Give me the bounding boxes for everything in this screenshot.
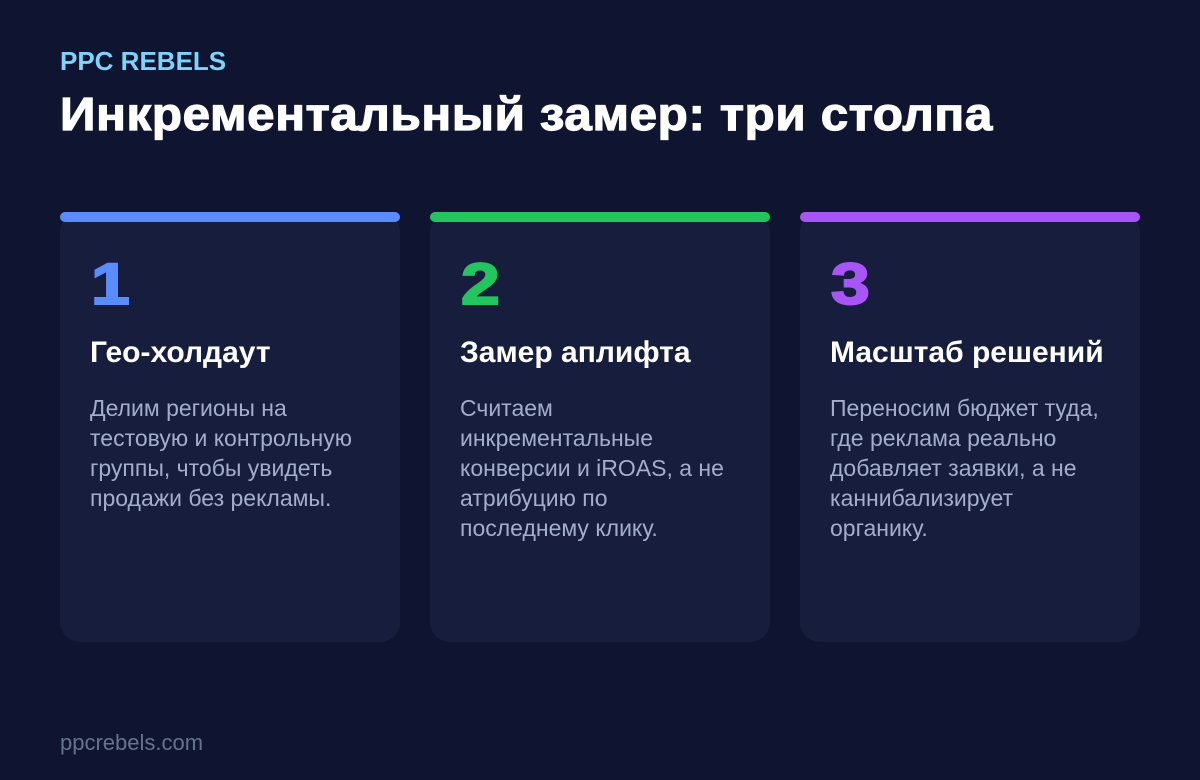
text: scale: где реклама реально	[830, 425, 1056, 451]
text: uplift: конверсии и iROAS, а не	[460, 455, 724, 481]
number 1: 1	[91, 252, 130, 317]
text: uplift: последнему клику.	[460, 515, 658, 541]
heading: geo holdout: Гео-холдаут	[90, 336, 271, 369]
heading: uplift: Замер аплифта	[460, 336, 691, 369]
number 3: 3	[831, 252, 870, 317]
text: uplift: Считаем	[460, 395, 553, 421]
text: scale: добавляет заявки, а не	[830, 455, 1077, 481]
text: geo holdout: Делим регионы на	[90, 395, 287, 421]
text: uplift	[460, 395, 724, 541]
text: scale: Переносим бюджет туда,	[830, 395, 1099, 421]
accent bar purple	[800, 212, 1140, 222]
text: scale	[830, 395, 1099, 541]
text: geo holdout: продажи без рекламы.	[90, 485, 331, 511]
accent bar blue	[60, 212, 400, 222]
heading: scale: Масштаб решений	[830, 336, 1104, 369]
panel: uplift measurement	[430, 212, 770, 642]
text: scale: каннибализирует	[830, 485, 1013, 511]
number 2: 2	[461, 252, 500, 317]
text: scale: органику.	[830, 515, 928, 541]
accent bar green	[430, 212, 770, 222]
footer: ppcrebels.com	[60, 730, 203, 755]
text: geo holdout: тестовую и контрольную	[90, 425, 352, 451]
text: geo holdout: группы, чтобы увидеть	[90, 455, 332, 481]
panel: decision scale	[800, 212, 1140, 642]
brand label: PPC REBELS	[60, 46, 226, 76]
panel: geo holdout	[60, 212, 400, 642]
text: geo holdout	[90, 395, 352, 511]
title: Инкрементальный замер: три столпа	[60, 88, 993, 140]
text: uplift: инкрементальные	[460, 425, 653, 451]
text: uplift: атрибуцию по	[460, 485, 608, 511]
